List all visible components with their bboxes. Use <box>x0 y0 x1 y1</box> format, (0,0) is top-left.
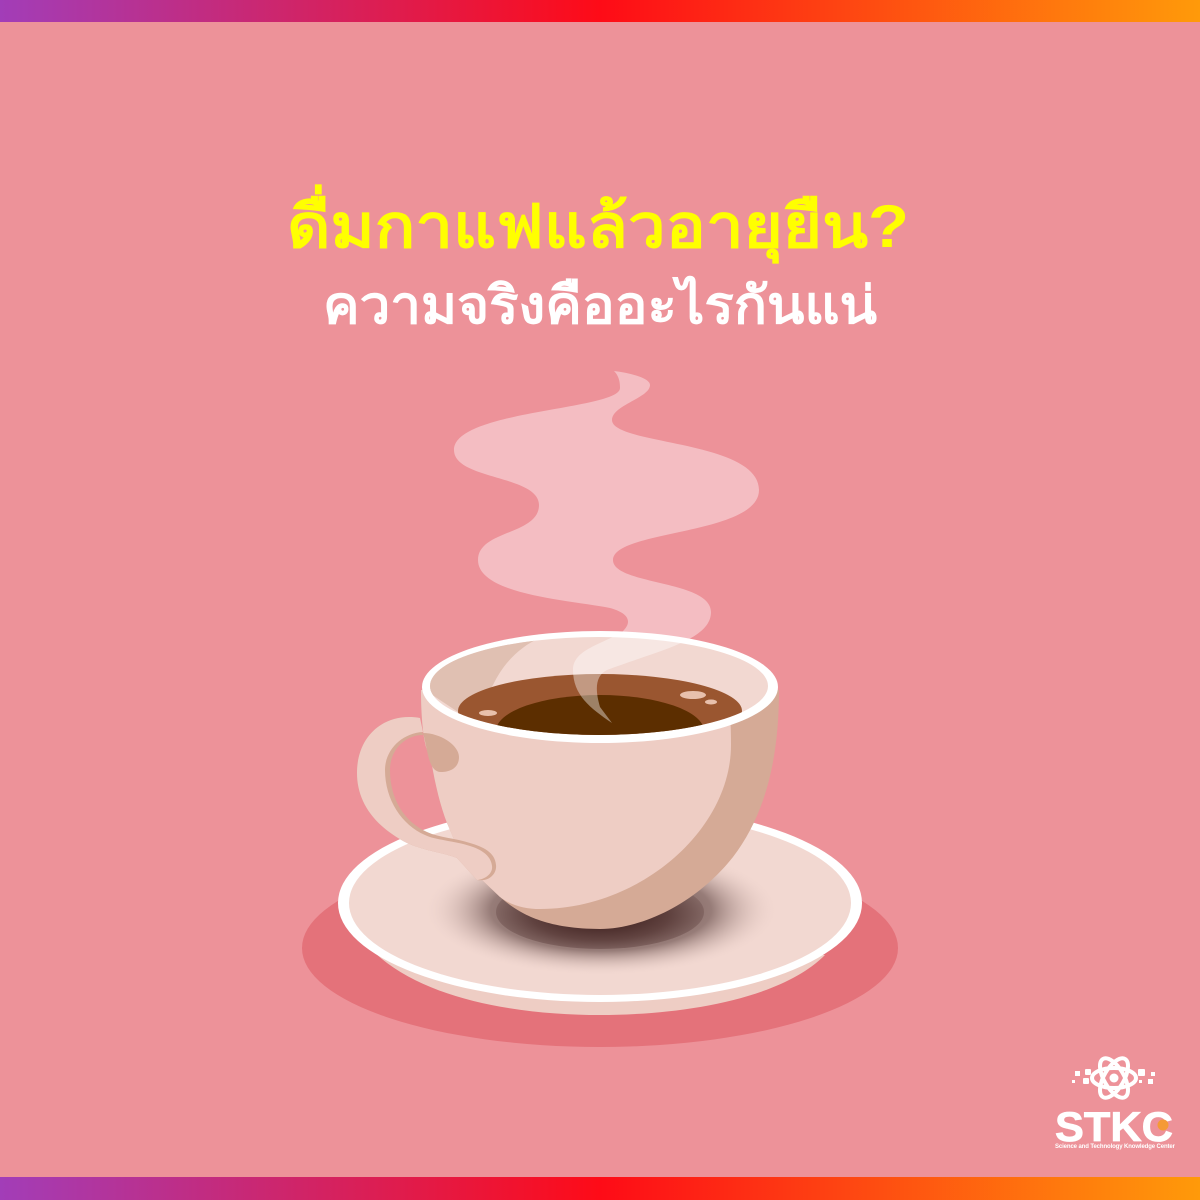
saucer <box>338 804 862 1015</box>
rim <box>422 631 778 743</box>
highlights <box>479 691 717 716</box>
logo accent dot <box>1158 1120 1168 1130</box>
coffee centre <box>497 695 702 735</box>
logo atom icon <box>1092 1054 1136 1102</box>
cup highlight <box>421 690 731 909</box>
saucer shadow <box>302 849 898 1047</box>
bottom gradient bar <box>0 1177 1200 1200</box>
coffee <box>458 674 742 735</box>
cup body <box>421 690 779 929</box>
cup handle <box>357 717 496 880</box>
title: ความจริงคืออะไรกันแน่ <box>323 275 877 335</box>
handle joint <box>423 733 459 772</box>
logo wordmark: STKC <box>1055 1103 1173 1150</box>
steam <box>454 371 759 723</box>
logo tagline: Science and Technology Knowledge Center <box>1055 1144 1176 1150</box>
logo pixels <box>1072 1069 1155 1084</box>
interior shade <box>430 640 534 718</box>
cup <box>357 630 780 940</box>
top gradient bar <box>0 0 1200 22</box>
title <box>287 184 909 335</box>
logo <box>1055 1054 1176 1150</box>
cup interior <box>430 637 768 735</box>
title: ดื่มกาแฟแล้วอายุยืน? <box>287 184 909 264</box>
